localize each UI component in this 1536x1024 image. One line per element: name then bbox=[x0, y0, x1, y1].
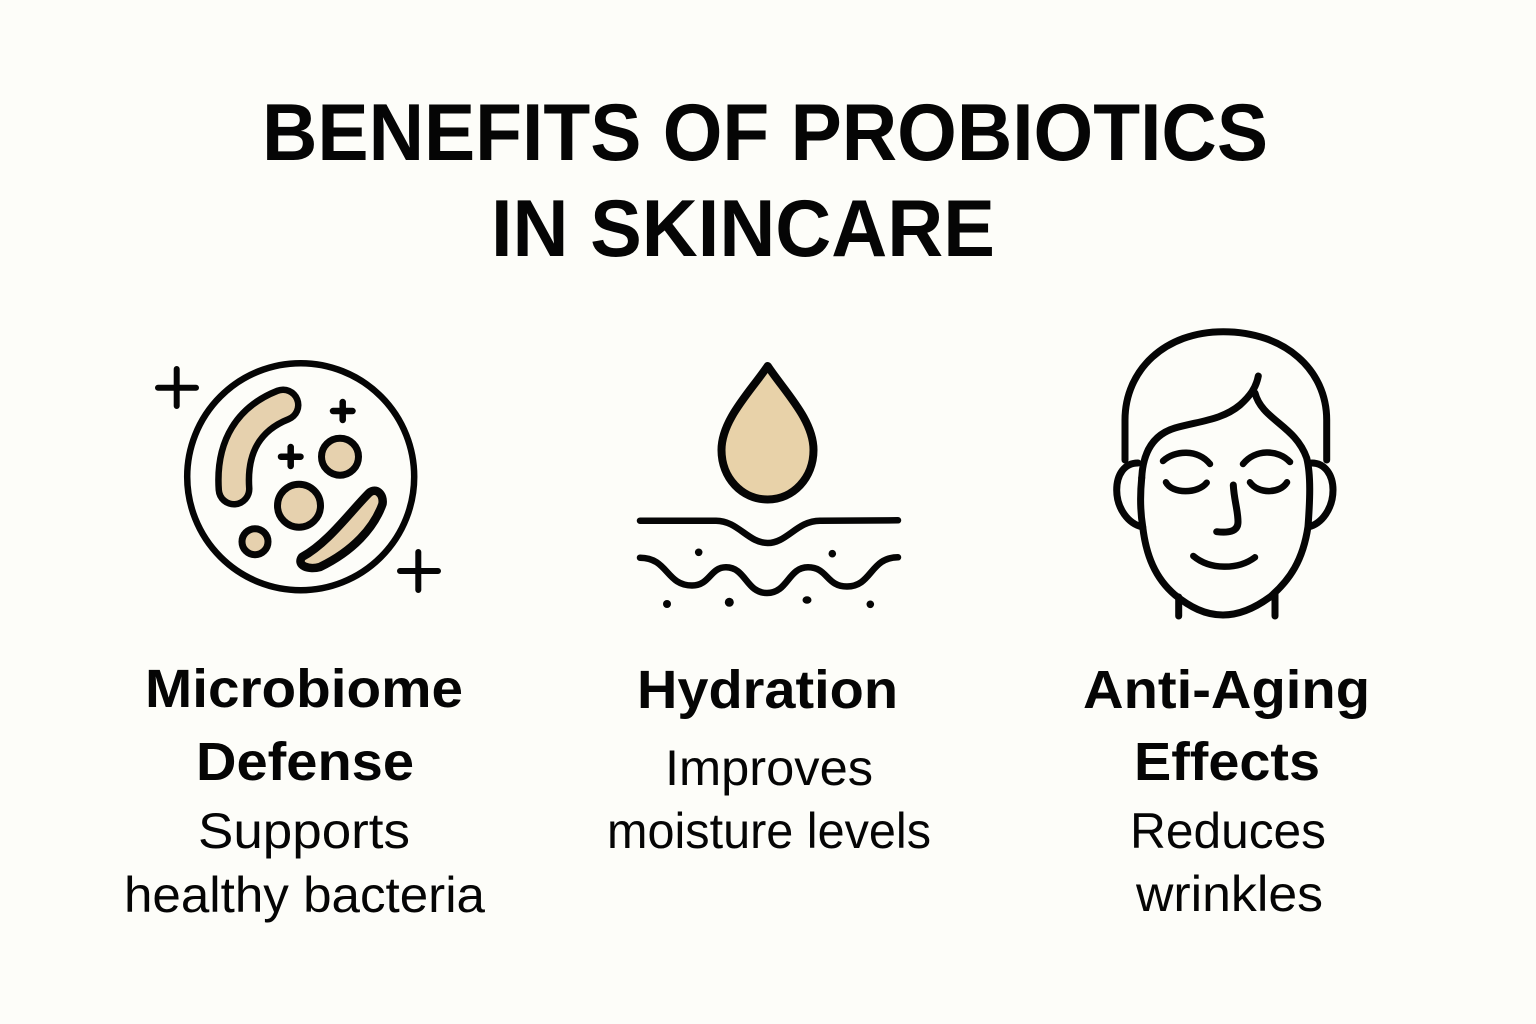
text: supports healthy bacteria: healthy bacteria bbox=[124, 867, 485, 923]
panel: microbiome defense bbox=[124, 363, 485, 923]
text: supports healthy bacteria: Supports bbox=[198, 803, 410, 859]
title: BENEFITS OF PROBIOTICS bbox=[262, 88, 1268, 178]
text: improves moisture levels: moisture levels bbox=[607, 803, 931, 859]
heading: anti-aging effects: Effects bbox=[1134, 732, 1320, 792]
title bbox=[262, 88, 1268, 274]
icon: microbiome petri circle bbox=[158, 363, 438, 590]
text: supports healthy bacteria bbox=[124, 803, 485, 923]
heading: anti-aging effects: Anti-Aging bbox=[1083, 660, 1370, 720]
text: reduces wrinkles: wrinkles bbox=[1135, 866, 1323, 922]
heading: microbiome defense bbox=[145, 659, 463, 792]
heading: microbiome defense: Defense bbox=[196, 732, 414, 792]
text: improves moisture levels: Improves bbox=[665, 740, 873, 796]
heading: microbiome defense: Microbiome bbox=[145, 659, 463, 719]
text: reduces wrinkles: Reduces bbox=[1130, 803, 1326, 859]
icon: face with closed eyes bbox=[1117, 332, 1333, 616]
icon: water drop over skin bbox=[640, 366, 898, 608]
text: improves moisture levels bbox=[607, 740, 931, 859]
text: reduces wrinkles bbox=[1130, 803, 1326, 922]
heading: anti-aging effects bbox=[1083, 660, 1370, 792]
heading: hydration: Hydration bbox=[637, 660, 898, 720]
panel: anti-aging effects bbox=[1083, 332, 1370, 922]
title: IN SKINCARE bbox=[491, 184, 995, 274]
panel: hydration bbox=[607, 366, 931, 859]
